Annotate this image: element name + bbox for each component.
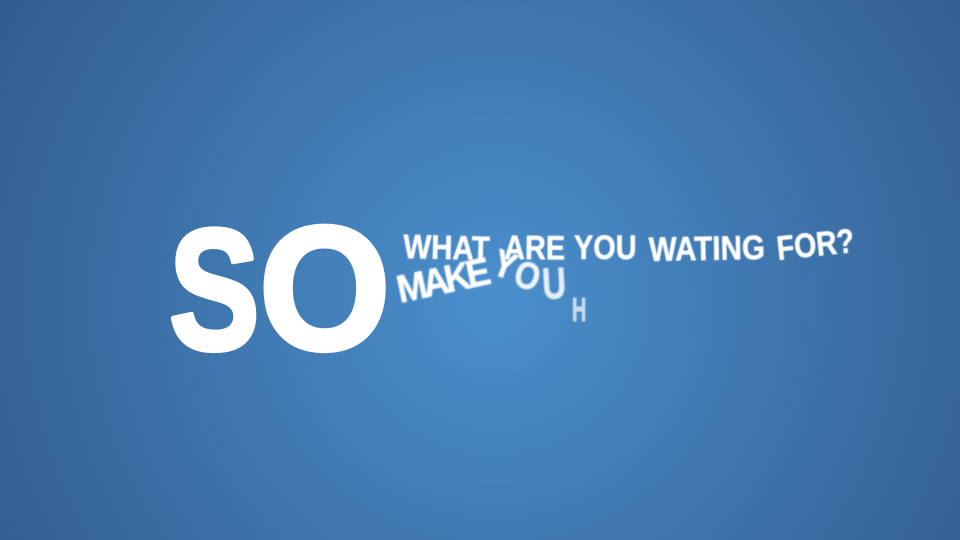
animated text: make you: Y (487, 241, 523, 289)
animated text: make you: U (541, 259, 567, 309)
animated text: make you: MAKE (393, 249, 493, 311)
headline: what are you waiting for: WATING (648, 228, 765, 268)
animated text: make you: H (572, 291, 586, 328)
headline: what are you waiting for: YOU (574, 228, 637, 267)
headline: what are you waiting for: FOR? (775, 222, 856, 268)
heading: SO (169, 190, 390, 387)
animated text: make you (393, 241, 586, 328)
heading: SO: S (169, 194, 260, 386)
heading: SO: O (259, 190, 390, 387)
headline: what are you waiting for (403, 222, 856, 268)
headline: what are you waiting for: ARE (504, 228, 565, 267)
headline: what are you waiting for: WHAT (403, 227, 491, 268)
animated text: make you: O (510, 253, 545, 300)
